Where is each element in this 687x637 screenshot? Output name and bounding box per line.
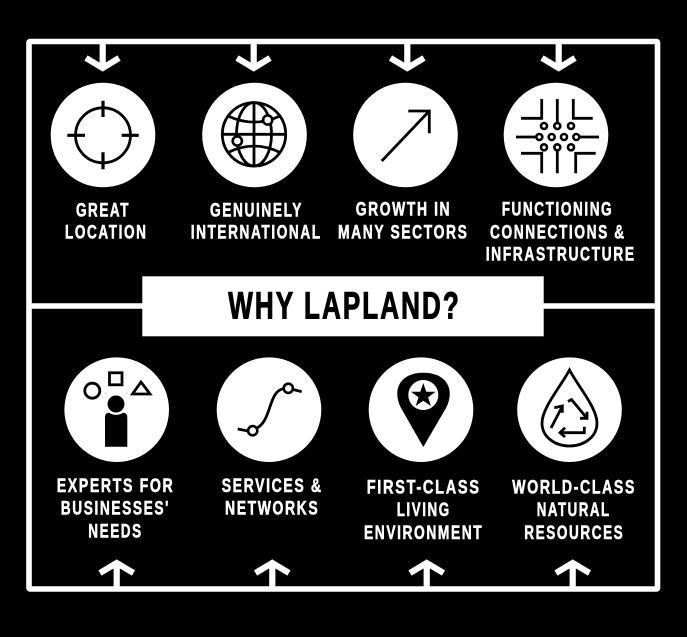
label: world-class natural resources: NATURAL xyxy=(537,500,611,521)
label: great location: GREAT xyxy=(76,201,130,222)
icon: services and networks curve xyxy=(217,357,321,462)
label: growth in many sectors: GROWTH IN xyxy=(356,200,451,221)
label: world-class natural resources: WORLD-CLASS xyxy=(512,477,636,498)
label: genuinely international: GENUINELY xyxy=(210,201,303,222)
label: first-class living environment: FIRST-CLASS xyxy=(367,477,481,498)
icon: natural resources recycle drop xyxy=(517,357,622,462)
label: services and networks xyxy=(222,476,323,520)
label: first-class living environment: LIVING xyxy=(397,500,451,521)
label: functioning connections and infrastructure: INFRASTRUCTURE xyxy=(486,245,636,266)
label: experts for businesses' needs: EXPERTS FOR xyxy=(57,476,174,497)
label: functioning connections and infrastructure xyxy=(486,200,636,266)
label: functioning connections and infrastructure: CONNECTIONS & xyxy=(490,223,626,244)
label: world-class natural resources xyxy=(512,477,636,544)
label: services and networks: SERVICES & xyxy=(222,476,323,497)
title banner: WHY LAPLAND? xyxy=(228,285,461,327)
label: genuinely international xyxy=(191,201,322,244)
icon: genuinely international globe xyxy=(202,83,307,187)
label: growth in many sectors xyxy=(338,200,468,244)
icon: living environment map pin xyxy=(369,357,473,462)
label: first-class living environment: ENVIRONMENT xyxy=(364,523,483,544)
outer frame xyxy=(29,42,658,589)
title banner xyxy=(142,276,544,336)
label: first-class living environment xyxy=(364,477,483,544)
arrows: pointing up from the bottom frame xyxy=(100,563,590,589)
label: services and networks: NETWORKS xyxy=(225,499,319,520)
label: genuinely international: INTERNATIONAL xyxy=(191,223,322,244)
label: experts for businesses' needs xyxy=(57,476,174,542)
label: growth in many sectors: MANY SECTORS xyxy=(338,223,468,244)
arrows: pointing down from the top frame xyxy=(86,42,575,68)
label: great location xyxy=(65,201,148,244)
label: world-class natural resources: RESOURCES xyxy=(524,523,624,544)
icon: experts person with shapes xyxy=(64,357,169,462)
label: functioning connections and infrastructure: FUNCTIONING xyxy=(502,200,613,221)
divider line xyxy=(29,303,657,309)
label: experts for businesses' needs: BUSINESSES' xyxy=(61,499,170,520)
icon: connections circuit xyxy=(504,83,608,187)
label: experts for businesses' needs: NEEDS xyxy=(88,521,143,542)
icon: great location target xyxy=(51,83,155,187)
icon: growth arrow xyxy=(353,83,458,187)
label: great location: LOCATION xyxy=(65,223,148,244)
